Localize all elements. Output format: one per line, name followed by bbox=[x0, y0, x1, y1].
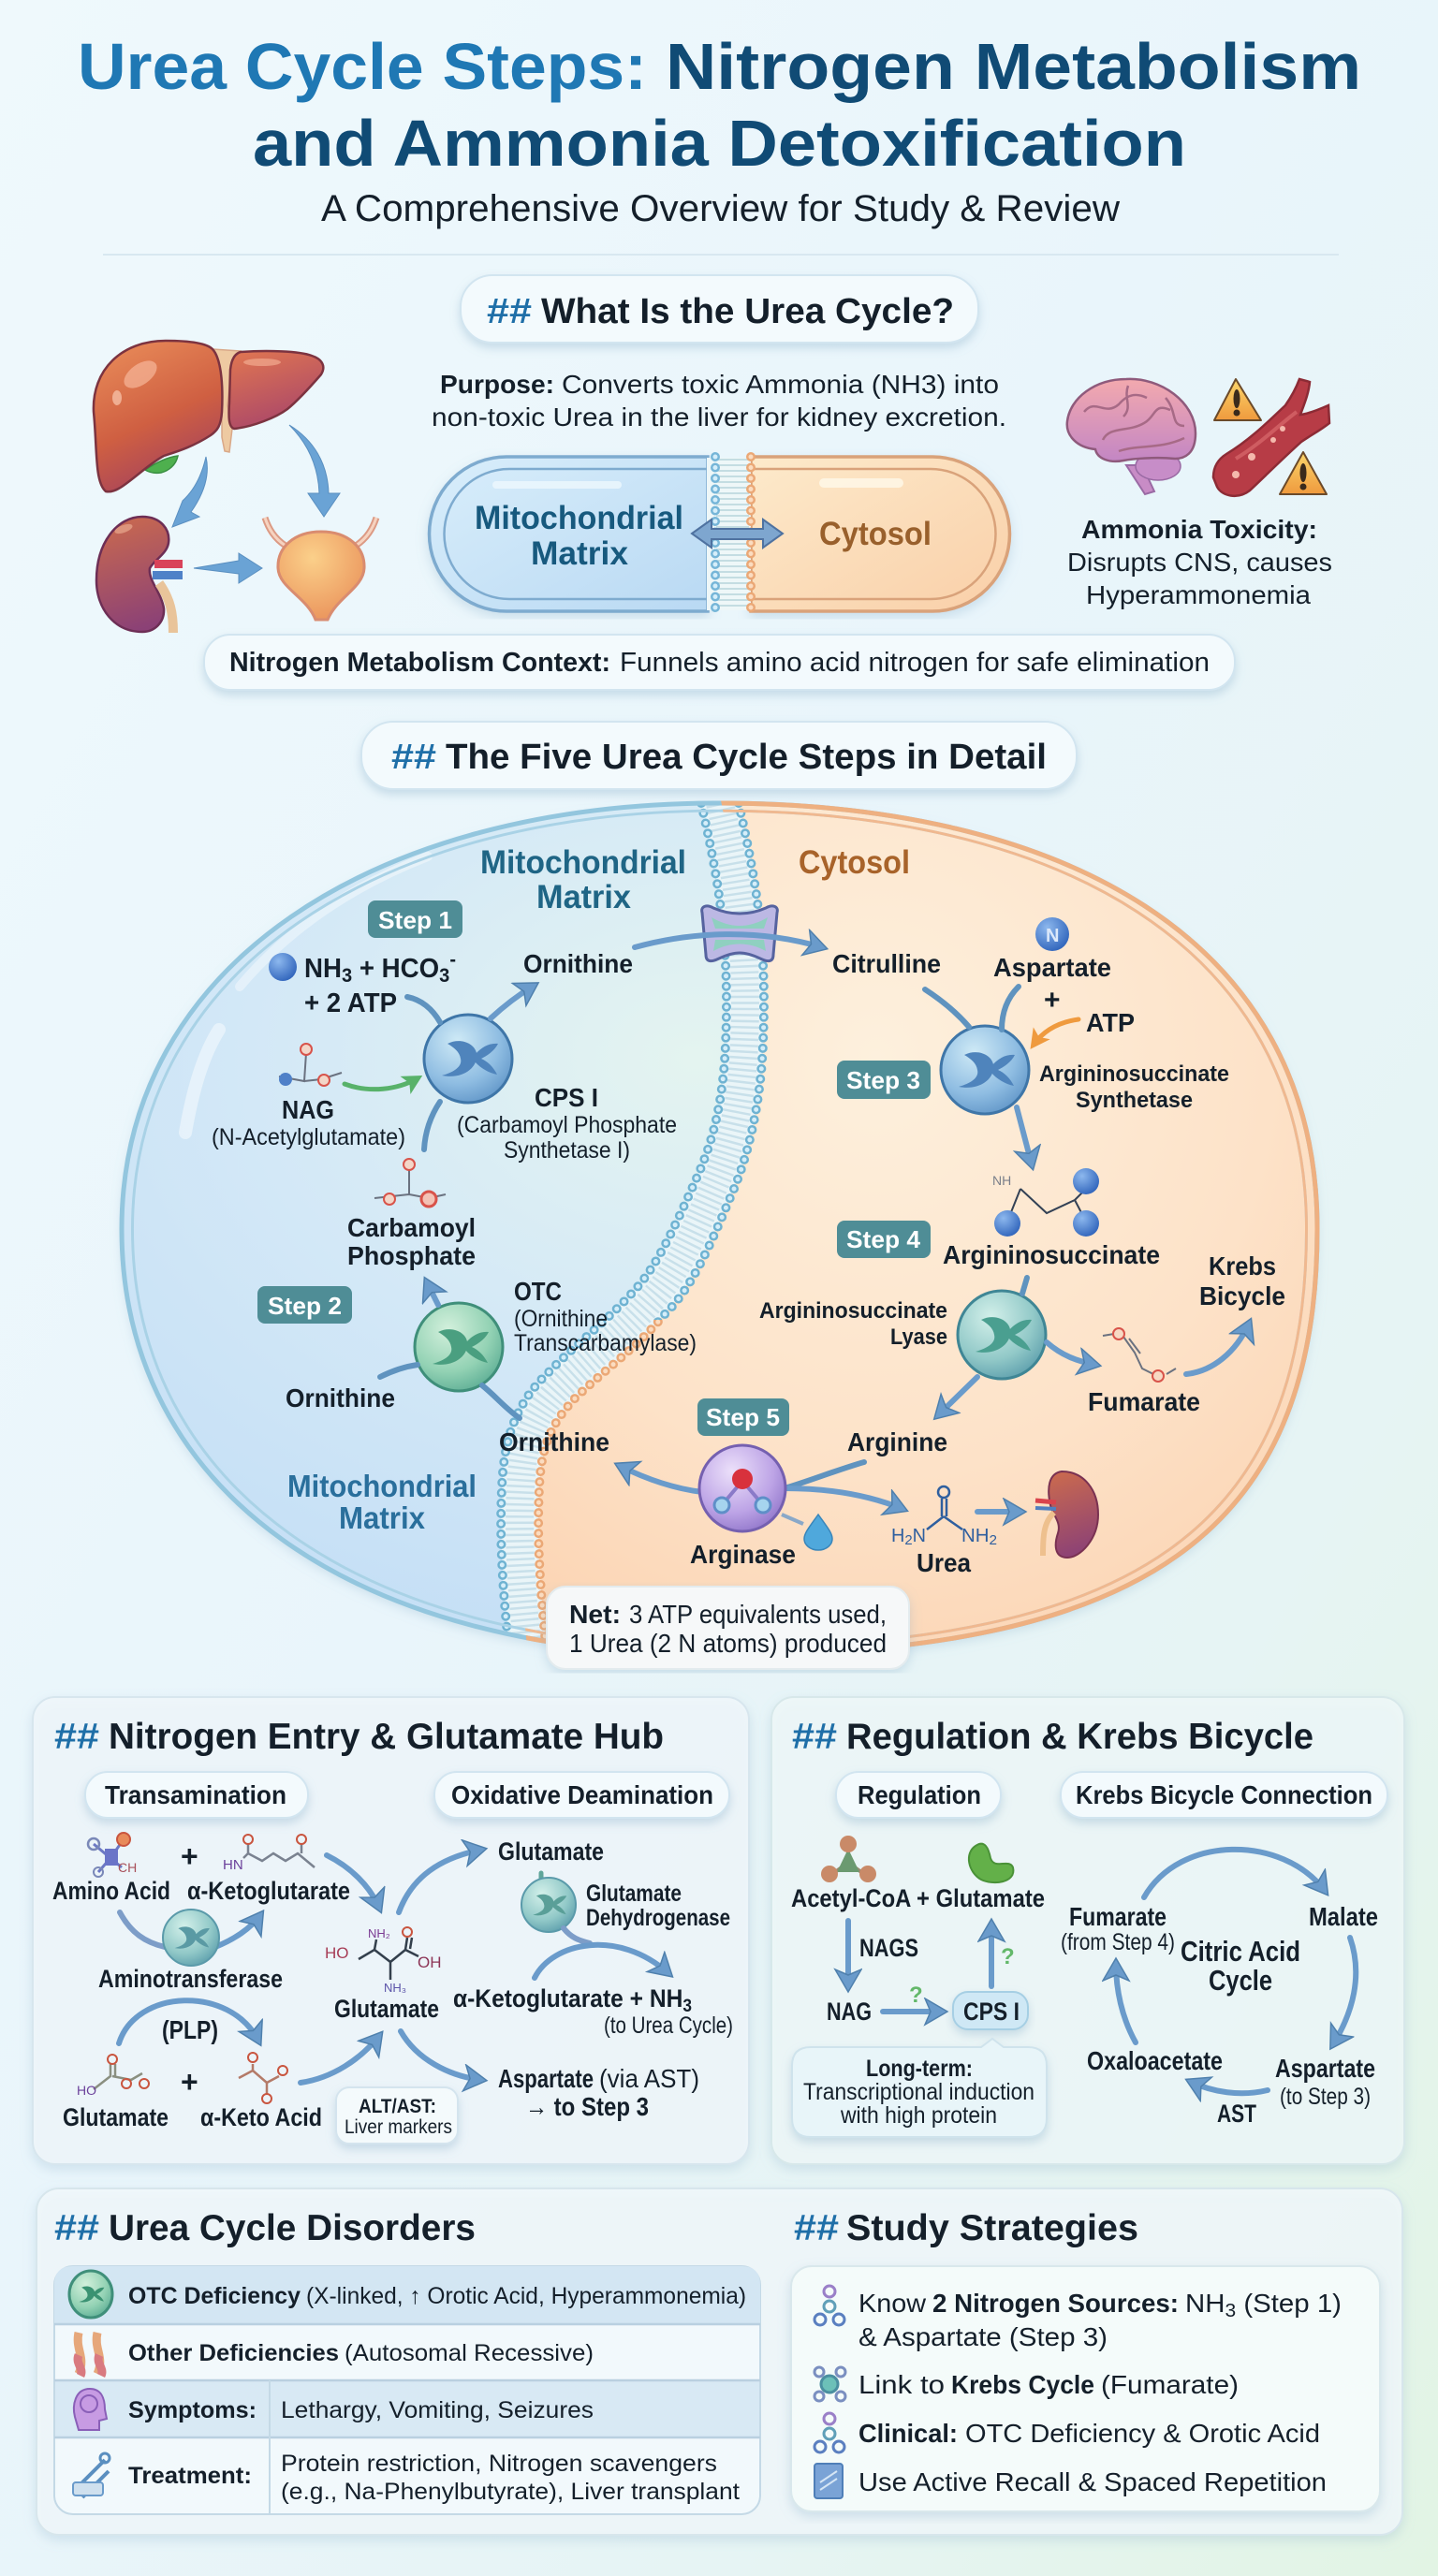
callout: ALT/AST liver markers bbox=[336, 2087, 458, 2144]
row: other deficiencies bbox=[128, 2340, 594, 2366]
aspartate N ball icon: N bbox=[1046, 926, 1059, 946]
label: krebs bicycle: Krebs bbox=[1209, 1251, 1276, 1281]
label: glutamate oxidative: Glutamate bbox=[498, 1837, 604, 1866]
labels: amino acid and alpha-ketoglutarate: α-Ketoglutarate bbox=[187, 1877, 350, 1905]
label: OTC: Transcarbamylase) bbox=[514, 1330, 697, 1356]
cycle labels: Cycle bbox=[1209, 1964, 1272, 1997]
step 5 badge bbox=[697, 1398, 789, 1436]
label: fumarate: Fumarate bbox=[1088, 1387, 1200, 1416]
nitrogen metabolism context pill bbox=[204, 635, 1235, 690]
panel: urea cycle cell diagram bbox=[122, 796, 1329, 1666]
label: glutamate dehydrogenase: Glutamate bbox=[586, 1881, 682, 1907]
arrow: CPS I up bbox=[989, 1925, 994, 1986]
subtitle: A Comprehensive Overview for Study & Review bbox=[321, 188, 1120, 229]
label: NAG: NAG bbox=[282, 1095, 334, 1124]
heading: The Five Urea Cycle Steps in Detail bbox=[361, 722, 1077, 789]
icon: chromosomes bbox=[78, 2333, 102, 2376]
pill: krebs bicycle connection bbox=[1061, 1772, 1387, 1818]
study item 1: 2 Nitrogen Sources: bbox=[932, 2289, 1179, 2318]
row: OTC deficiency: OTC Deficiency bbox=[128, 2283, 301, 2309]
cycle labels: Citric Acid bbox=[1181, 1935, 1300, 1968]
molecule: argininosuccinate: NH bbox=[992, 1173, 1011, 1188]
study item 1: & Aspartate (Step 3) bbox=[858, 2322, 1108, 2351]
label: OTC bbox=[514, 1277, 697, 1356]
icon: head with brain bbox=[74, 2389, 107, 2430]
arrow: ornithine to citrulline bbox=[635, 934, 822, 947]
molecule: glutamate structure: HO bbox=[325, 1944, 348, 1962]
study item 1 bbox=[858, 2289, 1342, 2351]
title: and Ammonia Detoxification bbox=[253, 107, 1186, 180]
icon: glutamate green blob bbox=[969, 1844, 1013, 1882]
arrow: liver to bladder bbox=[289, 425, 340, 517]
callout: ALT/AST liver markers: Liver markers bbox=[345, 2116, 452, 2138]
label: NAGS: NAGS bbox=[859, 1934, 918, 1962]
label: aminotransferase: Aminotransferase bbox=[98, 1965, 283, 1993]
label: arginase: Arginase bbox=[690, 1540, 796, 1569]
study item 2: Krebs Cycle bbox=[951, 2370, 1094, 2399]
step 3 badge bbox=[837, 1061, 931, 1099]
heading: urea cycle disorders: Urea Cycle Disorders bbox=[109, 2208, 476, 2248]
ammonia toxicity text bbox=[1067, 515, 1332, 609]
label: argininosuccinate: Argininosuccinate bbox=[943, 1240, 1160, 1269]
label: aspartate + ATP: + bbox=[1044, 985, 1061, 1016]
icon: molecule bbox=[814, 2286, 844, 2325]
cycle labels: (from Step 4) bbox=[1061, 1929, 1175, 1955]
step 3 badge: Step 3 bbox=[846, 1066, 920, 1094]
molecule: glutamate lower bbox=[77, 2055, 149, 2098]
molecule: urea: H bbox=[891, 1526, 904, 1546]
study item 2: (Fumarate) bbox=[1101, 2370, 1239, 2399]
pill: CPS I bbox=[953, 1992, 1028, 2029]
label: krebs bicycle bbox=[1199, 1251, 1285, 1310]
label: CPS I: CPS I bbox=[535, 1083, 598, 1112]
row: other deficiencies: Other Deficiencies bbox=[128, 2340, 339, 2366]
icon: OTC enzyme bbox=[69, 2271, 112, 2318]
cycle labels: Fumarate bbox=[1069, 1902, 1167, 1931]
cycle labels bbox=[1061, 1902, 1378, 2128]
study item 1: (Step 1) bbox=[1236, 2289, 1342, 2318]
capsule: mitochondrial matrix and cytosol: Mitochondrial bbox=[475, 500, 683, 536]
label: OTC: OTC bbox=[514, 1277, 562, 1306]
label: NAG bbox=[212, 1095, 405, 1150]
label: glutamate dehydrogenase bbox=[586, 1881, 730, 1931]
cycle labels: Oxaloacetate bbox=[1087, 2046, 1223, 2075]
label: carbamoyl phosphate: Carbamoyl bbox=[347, 1213, 476, 1242]
arrow: NAG activates bbox=[345, 1078, 418, 1090]
icon: network bbox=[814, 2367, 845, 2401]
label: arginine: Arginine bbox=[847, 1427, 947, 1456]
row: symptoms: Symptoms: bbox=[128, 2397, 257, 2423]
pill: krebs bicycle connection: Krebs Bicycle Connection bbox=[1076, 1780, 1372, 1809]
heading: ## bbox=[54, 1717, 99, 1757]
nitrogen metabolism context pill: Funnels amino acid nitrogen for safe elimination bbox=[620, 648, 1210, 678]
labels: amino acid and alpha-ketoglutarate: Amino Acid bbox=[52, 1877, 170, 1905]
compartment label: mitochondrial matrix bottom: Mitochondrial bbox=[287, 1469, 477, 1503]
compartment label: mitochondrial matrix bottom: Matrix bbox=[339, 1500, 426, 1535]
table: disorders bbox=[54, 2266, 760, 2514]
row: symptoms bbox=[128, 2397, 594, 2423]
study item 1: Know bbox=[858, 2289, 927, 2318]
heading: Nitrogen Entry & Glutamate Hub bbox=[109, 1717, 664, 1757]
icon: warning bbox=[1280, 452, 1327, 494]
capsule: mitochondrial matrix and cytosol: Matrix bbox=[531, 535, 629, 572]
callout: long-term: with high protein bbox=[840, 2102, 997, 2129]
label: alpha-ketoglutarate + NH3: (to Urea Cycle) bbox=[604, 2012, 733, 2039]
label: aspartate + ATP: ATP bbox=[1086, 1008, 1135, 1037]
label: citrulline: Citrulline bbox=[832, 949, 941, 978]
pill: transamination: Transamination bbox=[105, 1780, 286, 1809]
study item 4: Use Active Recall & Spaced Repetition bbox=[858, 2467, 1327, 2496]
icon: notebook bbox=[814, 2464, 843, 2498]
step 4 badge: Step 4 bbox=[846, 1225, 921, 1253]
row: OTC deficiency: (X-linked, ↑ Orotic Acid, Hyperammonemia) bbox=[306, 2283, 746, 2309]
question mark green: ? bbox=[909, 1983, 923, 2008]
purpose text: non-toxic Urea in the liver for kidney excretion. bbox=[432, 402, 1006, 432]
label: argininosuccinate lyase bbox=[759, 1298, 947, 1350]
label: aspartate + ATP: Aspartate bbox=[993, 953, 1111, 982]
arrow: liver to kidney bbox=[172, 457, 207, 527]
ammonia toxicity text: Ammonia Toxicity: bbox=[1081, 515, 1317, 544]
molecule: urea: N bbox=[913, 1526, 926, 1546]
substrate label: NH3 + HCO3- + 2 ATP bbox=[304, 949, 456, 1018]
substrate label: NH3 + HCO3- + 2 ATP: - bbox=[449, 949, 456, 971]
row: other deficiencies: (Autosomal Recessive) bbox=[345, 2340, 594, 2366]
label: carbamoyl phosphate bbox=[347, 1213, 476, 1270]
label: OTC: (Ornithine bbox=[514, 1306, 608, 1332]
substrate label: NH3 + HCO3- + 2 ATP: + HCO bbox=[352, 954, 439, 984]
enzyme: arginase bbox=[699, 1445, 785, 1531]
arrow: ATP input bbox=[1034, 1019, 1078, 1045]
step 1 badge: Step 1 bbox=[378, 906, 452, 934]
capsule: mitochondrial matrix and cytosol: Cytosol bbox=[819, 516, 932, 552]
icon: water drop bbox=[804, 1515, 832, 1550]
molecule: glutamate structure: OH bbox=[418, 1954, 442, 1971]
study item 1: 3 bbox=[1225, 2301, 1236, 2321]
arrows: oxidative deamination bbox=[535, 1928, 668, 1978]
molecule: glutamate structure: NH₃ bbox=[384, 1981, 406, 1995]
label: CPS I bbox=[457, 1083, 677, 1164]
labels: glutamate and alpha-keto acid: α-Keto Acid bbox=[200, 2103, 322, 2131]
callout: long-term bbox=[792, 2039, 1047, 2137]
arrows: step 4 connections bbox=[938, 1278, 1249, 1415]
enzyme: OTC bbox=[415, 1303, 503, 1391]
molecule: acetyl-CoA bbox=[821, 1836, 876, 1882]
net callout: Net: bbox=[569, 1600, 621, 1629]
label: CPS I: (Carbamoyl Phosphate bbox=[457, 1112, 677, 1138]
step 2 badge bbox=[257, 1286, 352, 1324]
pill: oxidative deamination bbox=[434, 1772, 729, 1818]
purpose text: Converts toxic Ammonia (NH3) into bbox=[562, 370, 999, 399]
label: NAG: NAG bbox=[827, 1998, 872, 2026]
membrane channel bbox=[702, 906, 777, 961]
icon: bladder bbox=[265, 518, 376, 620]
label: aspartate + ATP bbox=[993, 953, 1135, 1037]
ammonia toxicity text: Hyperammonemia bbox=[1086, 580, 1311, 609]
molecule: argininosuccinate bbox=[992, 1168, 1099, 1237]
label: aspartate via AST bbox=[498, 2064, 699, 2121]
compartment label: mitochondrial matrix bottom bbox=[287, 1469, 477, 1535]
molecule: NAG bbox=[279, 1044, 342, 1086]
box: study strategies bbox=[791, 2266, 1380, 2511]
label: aspartate via AST: Aspartate bbox=[498, 2064, 594, 2093]
pill: regulation: Regulation bbox=[858, 1780, 981, 1809]
row: treatment: (e.g., Na-Phenylbutyrate), Liver transplant bbox=[281, 2479, 740, 2505]
label: aspartate via AST: → to Step 3 bbox=[525, 2092, 649, 2121]
heading: study strategies: Study Strategies bbox=[846, 2208, 1138, 2248]
label: acetyl-CoA + glutamate: Acetyl-CoA + Glutamate bbox=[791, 1884, 1045, 1912]
label: ornithine right: Ornithine bbox=[499, 1427, 609, 1456]
label: ornithine: Ornithine bbox=[523, 949, 633, 978]
molecule: fumarate bbox=[1103, 1328, 1176, 1382]
label: urea: Urea bbox=[917, 1548, 971, 1577]
pill: CPS I: CPS I bbox=[963, 1998, 1020, 2026]
heading: The Five Urea Cycle Steps in Detail: ## bbox=[391, 738, 436, 777]
molecule: alpha-keto acid bbox=[239, 2053, 287, 2103]
title: Urea Cycle Steps: bbox=[78, 30, 647, 103]
pill: regulation bbox=[836, 1772, 1001, 1818]
labels: glutamate and alpha-keto acid bbox=[63, 2103, 322, 2131]
symbol: plus: + bbox=[181, 1839, 198, 1873]
study item 2 bbox=[858, 2370, 1239, 2399]
aspartate N ball icon bbox=[1035, 917, 1069, 951]
molecule: glutamate structure: NH₂ bbox=[368, 1926, 390, 1940]
cycle labels: Malate bbox=[1309, 1902, 1378, 1931]
molecule: urea: NH bbox=[961, 1526, 989, 1546]
label: glutamate hub: Glutamate bbox=[334, 1995, 439, 2023]
label: glutamate dehydrogenase: Dehydrogenase bbox=[586, 1905, 730, 1931]
enzyme: argininosuccinate synthetase bbox=[941, 1026, 1029, 1114]
study item 1: NH bbox=[1185, 2289, 1223, 2318]
icon: liver bbox=[94, 341, 323, 491]
row: treatment bbox=[128, 2451, 740, 2505]
label: argininosuccinate lyase: Lyase bbox=[890, 1325, 947, 1350]
label: alpha-ketoglutarate + NH3: α-Ketoglutarate + NH bbox=[453, 1984, 705, 2012]
ammonia toxicity text: Disrupts CNS, causes bbox=[1067, 548, 1332, 577]
compartment label: mitochondrial matrix top: Mitochondrial bbox=[480, 844, 686, 881]
molecule: urea: 2 bbox=[904, 1532, 913, 1548]
question mark green: ? bbox=[1001, 1944, 1015, 1969]
panel: regulation and krebs bicycle bbox=[771, 1697, 1404, 2164]
molecule: urea bbox=[891, 1486, 997, 1548]
compartment label: mitochondrial matrix top: Matrix bbox=[536, 879, 632, 915]
row: treatment: Treatment: bbox=[128, 2463, 252, 2489]
heading: The Five Urea Cycle Steps in Detail: The Five Urea Cycle Steps in Detail bbox=[446, 738, 1047, 777]
label: NAG: (N-Acetylglutamate) bbox=[212, 1124, 405, 1150]
panel: disorders and study strategies bbox=[37, 2188, 1402, 2535]
arrows: transamination flow bbox=[119, 1850, 481, 2083]
enzyme: glutamate dehydrogenase bbox=[521, 1873, 576, 1932]
label: alpha-ketoglutarate + NH3 bbox=[453, 1984, 733, 2039]
molecule: urea: 2 bbox=[989, 1532, 997, 1548]
heading: What Is the Urea Cycle?: What Is the Urea Cycle? bbox=[541, 292, 954, 331]
heading: urea cycle disorders: ## bbox=[54, 2208, 99, 2248]
cycle labels: AST bbox=[1217, 2100, 1256, 2128]
icon: kidney bbox=[96, 517, 183, 633]
arrows: CPS I connections bbox=[407, 986, 534, 1149]
row: treatment: Protein restriction, Nitrogen scavengers bbox=[281, 2451, 717, 2477]
step 1 badge bbox=[368, 900, 462, 938]
callout: long-term: Transcriptional induction bbox=[803, 2079, 1034, 2105]
chart: krebs cycle ring arrows bbox=[1116, 1850, 1356, 2093]
substrate label: NH3 + HCO3- + 2 ATP: + 2 ATP bbox=[304, 988, 397, 1018]
study item 3: Clinical: bbox=[858, 2419, 958, 2448]
step 4 badge bbox=[837, 1221, 931, 1258]
label: carbamoyl phosphate: Phosphate bbox=[347, 1241, 476, 1270]
symbol: plus: + bbox=[181, 2065, 198, 2099]
compartment label: cytosol: Cytosol bbox=[799, 844, 910, 881]
icon: brain bbox=[1067, 379, 1196, 494]
label: PLP: (PLP) bbox=[162, 2015, 218, 2044]
study item 3: OTC Deficiency & Orotic Acid bbox=[965, 2419, 1320, 2448]
arrow: acetyl-CoA to NAG bbox=[845, 1921, 851, 1986]
substrate label: NH3 + HCO3- + 2 ATP: NH bbox=[304, 954, 344, 984]
substrate label: NH3 + HCO3- + 2 ATP: 3 bbox=[439, 965, 449, 987]
icon: warning bbox=[1214, 379, 1261, 420]
nitrogen metabolism context pill: Nitrogen Metabolism Context: bbox=[229, 648, 610, 678]
arrow: kidney to bladder bbox=[194, 553, 262, 583]
callout: long-term: Long-term: bbox=[866, 2056, 973, 2082]
purpose text: Purpose: bbox=[440, 370, 554, 399]
enzyme: CPS I bbox=[424, 1015, 512, 1103]
enzyme: aminotransferase bbox=[163, 1910, 219, 1966]
row: symptoms: Lethargy, Vomiting, Seizures bbox=[281, 2397, 594, 2423]
study item 2: Link to bbox=[858, 2370, 945, 2399]
label: argininosuccinate synthetase: Argininosuccinate bbox=[1039, 1061, 1229, 1087]
heading: What Is the Urea Cycle? bbox=[461, 275, 978, 343]
icon: medical tool bbox=[73, 2453, 110, 2497]
net callout: 1 Urea (2 N atoms) produced bbox=[569, 1629, 887, 1658]
title bbox=[78, 30, 1361, 180]
compartment label: mitochondrial matrix top bbox=[480, 844, 686, 915]
molecule: carbamoyl phosphate bbox=[374, 1159, 446, 1207]
heading: ## bbox=[792, 1717, 837, 1757]
title: Nitrogen Metabolism bbox=[666, 30, 1361, 103]
label: krebs bicycle: Bicycle bbox=[1199, 1281, 1285, 1310]
step 2 badge: Step 2 bbox=[268, 1292, 342, 1320]
capsule: mitochondrial matrix and cytosol bbox=[429, 457, 1009, 612]
label: argininosuccinate synthetase: Synthetase bbox=[1076, 1088, 1193, 1113]
molecule: alpha-ketoglutarate: HN bbox=[223, 1857, 243, 1873]
molecule: alpha-ketoglutarate bbox=[223, 1835, 315, 1873]
label: argininosuccinate synthetase bbox=[1039, 1061, 1229, 1113]
molecule: amino acid bbox=[88, 1833, 137, 1877]
ammonia ball icon bbox=[269, 953, 297, 981]
molecule: amino acid: CH bbox=[118, 1860, 137, 1875]
icon: blood vessel bbox=[1213, 379, 1329, 496]
labels: amino acid and alpha-ketoglutarate bbox=[52, 1877, 350, 1905]
heading: study strategies: ## bbox=[794, 2208, 839, 2248]
icon: molecule bbox=[814, 2413, 844, 2452]
net callout bbox=[547, 1587, 909, 1669]
arrows: step 3 connections bbox=[925, 987, 1032, 1164]
label: alpha-ketoglutarate + NH3: 3 bbox=[682, 1997, 692, 2016]
net callout: 3 ATP equivalents used, bbox=[629, 1600, 887, 1629]
cycle labels: (to Step 3) bbox=[1280, 2084, 1371, 2110]
step 5 badge: Step 5 bbox=[706, 1403, 780, 1431]
icon: kidney small bbox=[1035, 1471, 1098, 1558]
purpose text bbox=[432, 370, 1006, 432]
heading: Regulation & Krebs Bicycle bbox=[846, 1717, 1313, 1757]
molecule: glutamate lower: HO bbox=[77, 2083, 96, 2098]
heading: What Is the Urea Cycle?: ## bbox=[487, 292, 532, 331]
arrows: OTC connections bbox=[380, 1282, 520, 1418]
label: ornithine left: Ornithine bbox=[286, 1383, 395, 1412]
label: aspartate via AST: (via AST) bbox=[599, 2064, 699, 2093]
callout: ALT/AST liver markers: ALT/AST: bbox=[359, 2096, 436, 2117]
panel: nitrogen entry and glutamate hub bbox=[33, 1697, 749, 2164]
pill: transamination bbox=[85, 1772, 308, 1818]
arrows: step 5 connections bbox=[620, 1462, 1020, 1524]
substrate label: NH3 + HCO3- + 2 ATP: 3 bbox=[342, 965, 352, 987]
molecule: glutamate structure bbox=[325, 1926, 442, 1995]
label: argininosuccinate lyase: Argininosuccinate bbox=[759, 1298, 947, 1324]
pill: oxidative deamination: Oxidative Deamination bbox=[451, 1780, 713, 1809]
label: CPS I: Synthetase I) bbox=[504, 1137, 630, 1164]
cycle labels: Aspartate bbox=[1275, 2054, 1375, 2083]
enzyme: argininosuccinate lyase bbox=[958, 1291, 1046, 1379]
arrow: NAG to CPS I bbox=[883, 2009, 942, 2014]
labels: glutamate and alpha-keto acid: Glutamate bbox=[63, 2103, 169, 2131]
